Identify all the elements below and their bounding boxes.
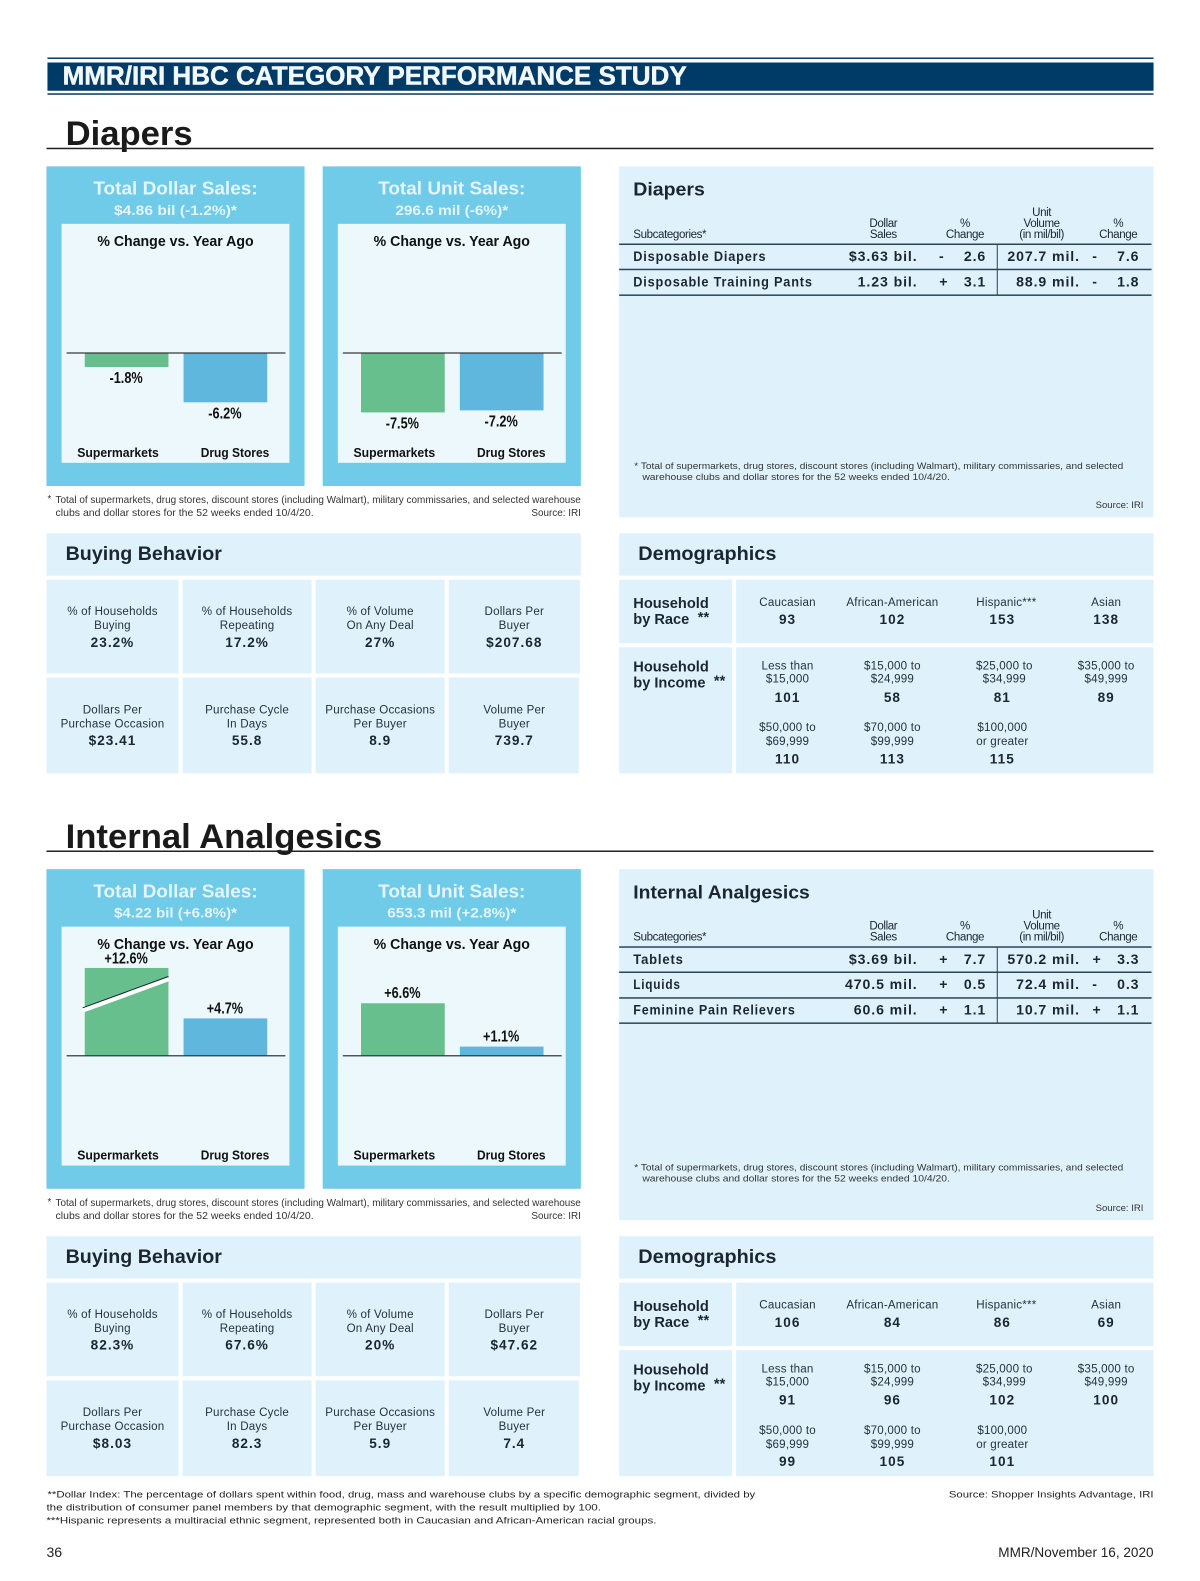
table footnote: warehouse clubs and dollar stores for the 52 weeks ended 10/4/20.	[641, 472, 950, 483]
panel: total dollar sales chart	[46, 869, 305, 1189]
household by income: $50,000 to	[759, 722, 816, 734]
metric: % of households repeating: % of Households	[202, 1309, 292, 1321]
panel: total dollar sales chart: Drug Stores	[201, 446, 269, 460]
household by income: $34,999	[983, 674, 1026, 686]
panel: total unit sales chart: Supermarkets	[353, 1149, 435, 1163]
metric: dollars per buyer	[485, 1309, 544, 1353]
table row: Disposable Training Pants: Disposable Training Pants	[633, 273, 813, 289]
metric: dollars per buyer: Dollars Per	[485, 606, 544, 618]
panel: total dollar sales chart: Drug Stores	[201, 1149, 269, 1163]
household by income: $25,000 to	[976, 661, 1033, 673]
table row: Disposable Diapers: 207.7 mil.	[1007, 248, 1080, 264]
table footnote	[634, 461, 1143, 511]
table row: Liquids: 470.5 mil.	[845, 976, 918, 992]
metric: purchase cycle in days: 82.3	[232, 1436, 262, 1451]
panel: total unit sales chart: Total Unit Sales:	[378, 179, 525, 199]
section heading: Diapers: Diapers	[66, 115, 193, 153]
table row: Disposable Training Pants: -	[1092, 273, 1098, 289]
section: Internal Analgesics	[46, 818, 1154, 1476]
panel: total dollar sales chart: $4.86 bil (-1.2%)*	[114, 203, 238, 218]
household by income: $15,000 to	[864, 661, 921, 673]
household by race: 69	[1098, 1315, 1115, 1330]
panel: buying behavior	[46, 533, 581, 773]
household by race: Caucasian	[759, 1300, 816, 1312]
chart footnote: clubs and dollar stores for the 52 weeks ended 10/4/20.	[56, 1211, 314, 1222]
metric: dollars per buyer: $207.68	[486, 635, 542, 650]
panel: total dollar sales chart: Supermarkets	[77, 1149, 159, 1163]
metric: purchase occasions per buyer	[325, 704, 435, 748]
panel: buying behavior: Buying Behavior	[66, 544, 222, 565]
household by income: 101	[775, 690, 800, 705]
metric: purchase cycle in days: Purchase Cycle	[205, 1407, 289, 1419]
metric: % of households repeating: Repeating	[220, 620, 274, 632]
metric: % of households repeating: 17.2%	[225, 635, 269, 650]
panel: demographics	[619, 533, 1154, 773]
panel: total unit sales chart	[323, 869, 581, 1189]
metric: dollars per purchase occasion: Purchase Occasion	[61, 718, 164, 730]
metric: purchase cycle in days: 55.8	[232, 733, 262, 748]
household by income: $99,999	[871, 1439, 914, 1451]
metric: volume per buyer: Volume Per	[483, 704, 545, 716]
table footnote: Source: IRI	[1096, 1203, 1143, 1214]
table row: Tablets: 7.7	[964, 951, 986, 967]
table header: Unit	[1032, 207, 1052, 219]
household by race: **	[698, 1313, 709, 1329]
chart footnote: clubs and dollar stores for the 52 weeks ended 10/4/20.	[56, 508, 314, 519]
table header: Change	[1099, 932, 1137, 944]
panel: total dollar sales chart: -6.2%	[208, 404, 242, 422]
panel: total dollar sales chart: % Change vs. Year Ago	[97, 234, 254, 250]
household by race: 86	[994, 1315, 1011, 1330]
household by income: $34,999	[983, 1376, 1026, 1388]
household by income: 115	[990, 751, 1015, 766]
table row: Liquids: 0.3	[1117, 976, 1139, 992]
household by race: Asian	[1091, 597, 1121, 609]
metric: dollars per buyer: Buyer	[499, 620, 530, 632]
household by race: African-American	[846, 597, 938, 609]
table row: Disposable Diapers	[633, 248, 1139, 264]
metric: % of households repeating	[202, 606, 292, 650]
panel: total unit sales chart: Supermarkets	[353, 446, 435, 460]
household by income: $49,999	[1085, 1376, 1128, 1388]
table row: Disposable Diapers: $3.63 bil.	[849, 248, 918, 264]
panel: buying behavior	[46, 1236, 581, 1476]
household by income: $70,000 to	[864, 722, 921, 734]
metric: dollars per buyer: Buyer	[499, 1323, 530, 1335]
household by income: 100	[1093, 1393, 1119, 1408]
household by income: 89	[1098, 690, 1115, 705]
metric: % of volume on any deal: 20%	[365, 1338, 395, 1353]
household by income: 102	[989, 1393, 1015, 1408]
metric: % of households buying: Buying	[94, 1323, 131, 1335]
metric: % of households buying	[67, 1309, 158, 1353]
metric: purchase cycle in days	[205, 1407, 289, 1451]
table row: Disposable Training Pants: 1.8	[1117, 273, 1139, 289]
page footnotes: **Dollar Index: The percentage of dollars spent within food, drug, mass and warehouse clubs by a specific demographic segment, divided by	[47, 1489, 756, 1500]
table header: Change	[946, 229, 984, 241]
panel: demographics: Demographics	[638, 544, 776, 565]
table header: Change	[946, 932, 984, 944]
household by race: 93	[779, 612, 796, 627]
panel: total unit sales chart: -7.5%	[386, 415, 419, 433]
table header: Sales	[870, 229, 897, 241]
panel: total unit sales chart: Drug Stores	[477, 446, 546, 460]
table row: Feminine Pain Relievers: 10.7 mil.	[1016, 1001, 1080, 1017]
table row: Liquids	[633, 976, 1139, 992]
metric: % of households buying	[67, 606, 158, 650]
chart footnote: Source: IRI	[531, 1211, 581, 1222]
metric: volume per buyer	[483, 1407, 545, 1451]
household by race: Household	[633, 596, 709, 612]
metric: % of volume on any deal	[347, 606, 414, 650]
table header: Volume	[1024, 921, 1060, 933]
table header: Unit	[1032, 910, 1052, 922]
chart footnote	[47, 494, 581, 519]
table row: Tablets: $3.69 bil.	[849, 951, 918, 967]
table row: Disposable Diapers: 2.6	[964, 248, 986, 264]
metric: dollars per purchase occasion: Dollars Per	[83, 1407, 142, 1419]
household by income: $35,000 to	[1078, 1363, 1135, 1375]
metric: % of volume on any deal: % of Volume	[347, 606, 414, 618]
household by income: $15,000	[766, 674, 809, 686]
metric: % of households repeating: % of Households	[202, 606, 292, 618]
table row: Tablets: +	[1093, 951, 1102, 967]
household by income: 113	[880, 751, 905, 766]
metric: purchase occasions per buyer: Per Buyer	[354, 1421, 407, 1433]
metric: volume per buyer	[483, 704, 545, 748]
metric: dollars per purchase occasion: $23.41	[89, 733, 136, 748]
table row: Tablets: 570.2 mil.	[1007, 951, 1080, 967]
panel: total dollar sales chart: Supermarkets	[77, 446, 159, 460]
table header: (in mil/bil)	[1019, 932, 1065, 944]
panel: subcategory table: Diapers	[633, 180, 705, 200]
household by income: 105	[880, 1454, 905, 1469]
metric: dollars per buyer: Dollars Per	[485, 1309, 544, 1321]
household by income: $25,000 to	[976, 1363, 1033, 1375]
header banner	[47, 57, 1154, 95]
metric: % of households repeating: Repeating	[220, 1323, 274, 1335]
table row: Tablets: 3.3	[1117, 951, 1139, 967]
panel: total unit sales chart: 653.3 mil (+2.8%)*	[387, 906, 517, 921]
household by income: Less than	[762, 1363, 814, 1375]
panel: total dollar sales chart: $4.22 bil (+6.8%)*	[114, 906, 238, 921]
household by income: 110	[775, 751, 800, 766]
bar: drug stores	[184, 353, 267, 402]
table row: Feminine Pain Relievers: +	[939, 1001, 948, 1017]
metric: % of households buying: Buying	[94, 620, 131, 632]
table row: Disposable Training Pants	[633, 273, 1139, 289]
table header: Subcategories*	[633, 229, 707, 241]
panel: total unit sales chart: +6.6%	[384, 984, 421, 1002]
table row: Liquids: +	[939, 976, 948, 992]
table header: (in mil/bil)	[1019, 229, 1065, 241]
household by income: Less than	[762, 661, 814, 673]
table footnote	[634, 1163, 1143, 1214]
panel: total unit sales chart: Total Unit Sales:	[378, 881, 525, 901]
panel: subcategory table: Internal Analgesics	[633, 882, 810, 902]
household by income: $69,999	[766, 736, 809, 748]
household by race: **	[698, 610, 709, 626]
panel: total unit sales chart: +1.1%	[483, 1028, 519, 1046]
table row: Disposable Diapers: 7.6	[1117, 248, 1139, 264]
metric: % of households buying: 23.2%	[91, 635, 134, 650]
panel: total dollar sales chart: Total Dollar Sales:	[93, 881, 258, 901]
page footnotes	[46, 1489, 1154, 1527]
metric: volume per buyer: 739.7	[495, 733, 534, 748]
metric: dollars per buyer	[485, 606, 544, 650]
table header: %	[1113, 921, 1123, 933]
metric: dollars per purchase occasion: $8.03	[93, 1436, 132, 1451]
metric: dollars per purchase occasion: Purchase Occasion	[61, 1421, 164, 1433]
bar: supermarkets with axis break	[83, 968, 168, 1056]
metric: purchase occasions per buyer: 8.9	[369, 733, 391, 748]
table row: Tablets	[633, 951, 1139, 967]
household by income: $99,999	[871, 736, 914, 748]
bar: supermarkets	[85, 353, 168, 367]
household by race	[633, 1299, 1121, 1331]
table row: Disposable Diapers: -	[939, 248, 945, 264]
table header	[633, 207, 1137, 241]
table row: Feminine Pain Relievers: 60.6 mil.	[854, 1001, 918, 1017]
chart footnote: Total of supermarkets, drug stores, discount stores (including Walmart), military commissaries, and selected warehouse	[56, 495, 581, 506]
panel: total dollar sales chart: Total Dollar Sales:	[93, 179, 258, 199]
panel: demographics	[619, 1236, 1154, 1476]
metric: % of volume on any deal: On Any Deal	[347, 620, 414, 632]
table row: Liquids: Liquids	[633, 976, 681, 992]
household by income: Household	[633, 660, 709, 676]
metric: purchase occasions per buyer: 5.9	[369, 1436, 391, 1451]
section heading: Internal Analgesics: Internal Analgesics	[66, 818, 382, 856]
chart footnote: *	[47, 1197, 51, 1208]
panel: total dollar sales chart: -1.8%	[109, 369, 143, 387]
page footnotes: ***Hispanic represents a multiracial ethnic segment, represented both in Caucasian and African-American racial groups.	[46, 1516, 656, 1527]
household by income: $69,999	[766, 1439, 809, 1451]
table header: Sales	[870, 932, 897, 944]
metric: volume per buyer: 7.4	[503, 1436, 525, 1451]
household by income: 101	[989, 1454, 1015, 1469]
metric: % of households buying: 82.3%	[91, 1338, 134, 1353]
chart footnote: Source: IRI	[531, 508, 581, 519]
table footnote: * Total of supermarkets, drug stores, discount stores (including Walmart), military commissaries, and selected	[634, 1163, 1123, 1174]
household by income: $70,000 to	[864, 1425, 921, 1437]
metric: volume per buyer: Buyer	[499, 718, 530, 730]
table header: %	[960, 921, 970, 933]
metric: % of households buying: % of Households	[67, 606, 158, 618]
metric: % of households buying: % of Households	[67, 1309, 158, 1321]
household by race: 84	[884, 1315, 901, 1330]
table footnote: * Total of supermarkets, drug stores, discount stores (including Walmart), military commissaries, and selected	[634, 461, 1123, 472]
household by race: Household	[633, 1299, 709, 1315]
table row: Tablets: +	[939, 951, 948, 967]
household by income: $15,000	[766, 1376, 809, 1388]
panel: total dollar sales chart: +4.7%	[207, 999, 243, 1017]
metric: % of volume on any deal: 27%	[365, 635, 395, 650]
household by race	[633, 596, 1121, 628]
metric: purchase occasions per buyer: Purchase Occasions	[325, 1407, 435, 1419]
household by income: $24,999	[871, 1376, 914, 1388]
page footnotes: the distribution of consumer panel members by that demographic segment, with the result multiplied by 100.	[46, 1502, 601, 1513]
panel: total unit sales chart: -7.2%	[485, 413, 518, 431]
chart footnote	[47, 1197, 581, 1222]
household by income: $24,999	[871, 674, 914, 686]
household by income: $15,000 to	[864, 1363, 921, 1375]
page footnotes: Source: Shopper Insights Advantage, IRI	[949, 1489, 1154, 1500]
panel: subcategory table	[619, 869, 1154, 1220]
metric: % of households repeating	[202, 1309, 292, 1353]
panel: total dollar sales chart: +12.6%	[104, 949, 148, 967]
panel: subcategory table	[619, 166, 1154, 517]
table row: Disposable Training Pants: 1.23 bil.	[858, 273, 918, 289]
bar: drug stores	[184, 1018, 267, 1056]
household by race: 106	[775, 1315, 800, 1330]
table header	[633, 910, 1137, 944]
household by income	[633, 1362, 1135, 1469]
table row: Disposable Training Pants: 88.9 mil.	[1016, 273, 1080, 289]
panel: total unit sales chart: Drug Stores	[477, 1149, 546, 1163]
metric: dollars per purchase occasion	[61, 1407, 164, 1451]
household by race: 153	[989, 612, 1015, 627]
household by income: 81	[994, 690, 1011, 705]
household by income: by Income	[633, 676, 706, 692]
household by income: or greater	[976, 1439, 1028, 1451]
metric: purchase cycle in days: Purchase Cycle	[205, 704, 289, 716]
household by income: 99	[779, 1454, 796, 1469]
table header: Dollar	[869, 218, 898, 230]
household by race: 138	[1093, 612, 1119, 627]
panel: total unit sales chart: 296.6 mil (-6%)*	[395, 203, 509, 218]
household by income	[633, 660, 1135, 766]
bar: supermarkets	[361, 1003, 445, 1056]
metric: purchase cycle in days: In Days	[227, 1421, 267, 1433]
issue date: MMR/November 16, 2020	[998, 1544, 1154, 1560]
table row: Feminine Pain Relievers	[633, 1001, 1139, 1017]
household by income: Household	[633, 1362, 709, 1378]
metric: purchase occasions per buyer	[325, 1407, 435, 1451]
metric: % of volume on any deal	[347, 1309, 414, 1353]
panel: total unit sales chart: % Change vs. Year Ago	[374, 234, 530, 250]
metric: % of households repeating: 67.6%	[225, 1338, 269, 1353]
metric: dollars per buyer: $47.62	[490, 1338, 538, 1353]
household by income: or greater	[976, 736, 1028, 748]
household by income: $100,000	[977, 722, 1027, 734]
metric: volume per buyer: Buyer	[499, 1421, 530, 1433]
household by income: $100,000	[977, 1425, 1027, 1437]
header banner: MMR/IRI HBC CATEGORY PERFORMANCE STUDY	[63, 61, 687, 91]
household by race: Asian	[1091, 1300, 1121, 1312]
metric: purchase occasions per buyer: Per Buyer	[354, 718, 407, 730]
table row: Disposable Diapers: Disposable Diapers	[633, 248, 766, 264]
household by income: by Income	[633, 1378, 706, 1394]
household by income: $35,000 to	[1078, 661, 1135, 673]
metric: dollars per purchase occasion	[61, 704, 164, 748]
household by race: by Race	[633, 1315, 689, 1331]
panel: total unit sales chart: % Change vs. Year Ago	[374, 937, 530, 953]
chart footnote: *	[47, 494, 51, 505]
panel: buying behavior: Buying Behavior	[66, 1247, 222, 1268]
table row: Feminine Pain Relievers: 1.1	[1117, 1001, 1139, 1017]
household by race: Caucasian	[759, 597, 816, 609]
metric: purchase occasions per buyer: Purchase Occasions	[325, 704, 435, 716]
household by race: Hispanic***	[976, 1300, 1037, 1312]
bar: supermarkets	[361, 353, 445, 412]
table header: Subcategories*	[633, 932, 707, 944]
table row: Liquids: 0.5	[964, 976, 986, 992]
household by race: Hispanic***	[976, 597, 1037, 609]
section: Diapers	[46, 115, 1154, 773]
bar: drug stores	[460, 1047, 544, 1056]
table row: Disposable Diapers: -	[1092, 248, 1098, 264]
chart footnote: Total of supermarkets, drug stores, discount stores (including Walmart), military commissaries, and selected warehouse	[56, 1198, 581, 1209]
panel: total dollar sales chart	[46, 166, 305, 486]
panel: total dollar sales chart: % Change vs. Year Ago	[97, 937, 254, 953]
household by income: 96	[884, 1393, 901, 1408]
table header: %	[1113, 218, 1123, 230]
table header: %	[960, 218, 970, 230]
household by income: $50,000 to	[759, 1425, 816, 1437]
household by income: $49,999	[1085, 674, 1128, 686]
table footnote: warehouse clubs and dollar stores for the 52 weeks ended 10/4/20.	[641, 1174, 950, 1185]
household by income: **	[714, 674, 726, 690]
household by income: **	[714, 1376, 726, 1392]
household by income: 58	[884, 690, 901, 705]
table row: Feminine Pain Relievers: +	[1093, 1001, 1102, 1017]
table row: Liquids: 72.4 mil.	[1016, 976, 1080, 992]
metric: volume per buyer: Volume Per	[483, 1407, 545, 1419]
table row: Feminine Pain Relievers: 1.1	[964, 1001, 986, 1017]
table row: Feminine Pain Relievers: Feminine Pain Relievers	[633, 1001, 796, 1017]
table header: Change	[1099, 229, 1137, 241]
table row: Liquids: -	[1092, 976, 1098, 992]
metric: % of volume on any deal: % of Volume	[347, 1309, 414, 1321]
household by race: African-American	[846, 1300, 938, 1312]
table header: Volume	[1024, 218, 1060, 230]
bar: drug stores	[460, 353, 544, 410]
metric: % of volume on any deal: On Any Deal	[347, 1323, 414, 1335]
metric: purchase cycle in days	[205, 704, 289, 748]
page number: 36	[46, 1544, 62, 1560]
metric: purchase cycle in days: In Days	[227, 718, 267, 730]
metric: dollars per purchase occasion: Dollars Per	[83, 704, 142, 716]
table row: Disposable Training Pants: 3.1	[964, 273, 986, 289]
panel: demographics: Demographics	[638, 1247, 776, 1268]
table header: Dollar	[869, 921, 898, 933]
household by race: 102	[880, 612, 905, 627]
household by race: by Race	[633, 612, 689, 628]
table row: Disposable Training Pants: +	[939, 273, 948, 289]
panel: total unit sales chart	[323, 166, 581, 486]
household by income: 91	[779, 1393, 796, 1408]
table row: Tablets: Tablets	[633, 951, 684, 967]
table footnote: Source: IRI	[1096, 500, 1143, 511]
